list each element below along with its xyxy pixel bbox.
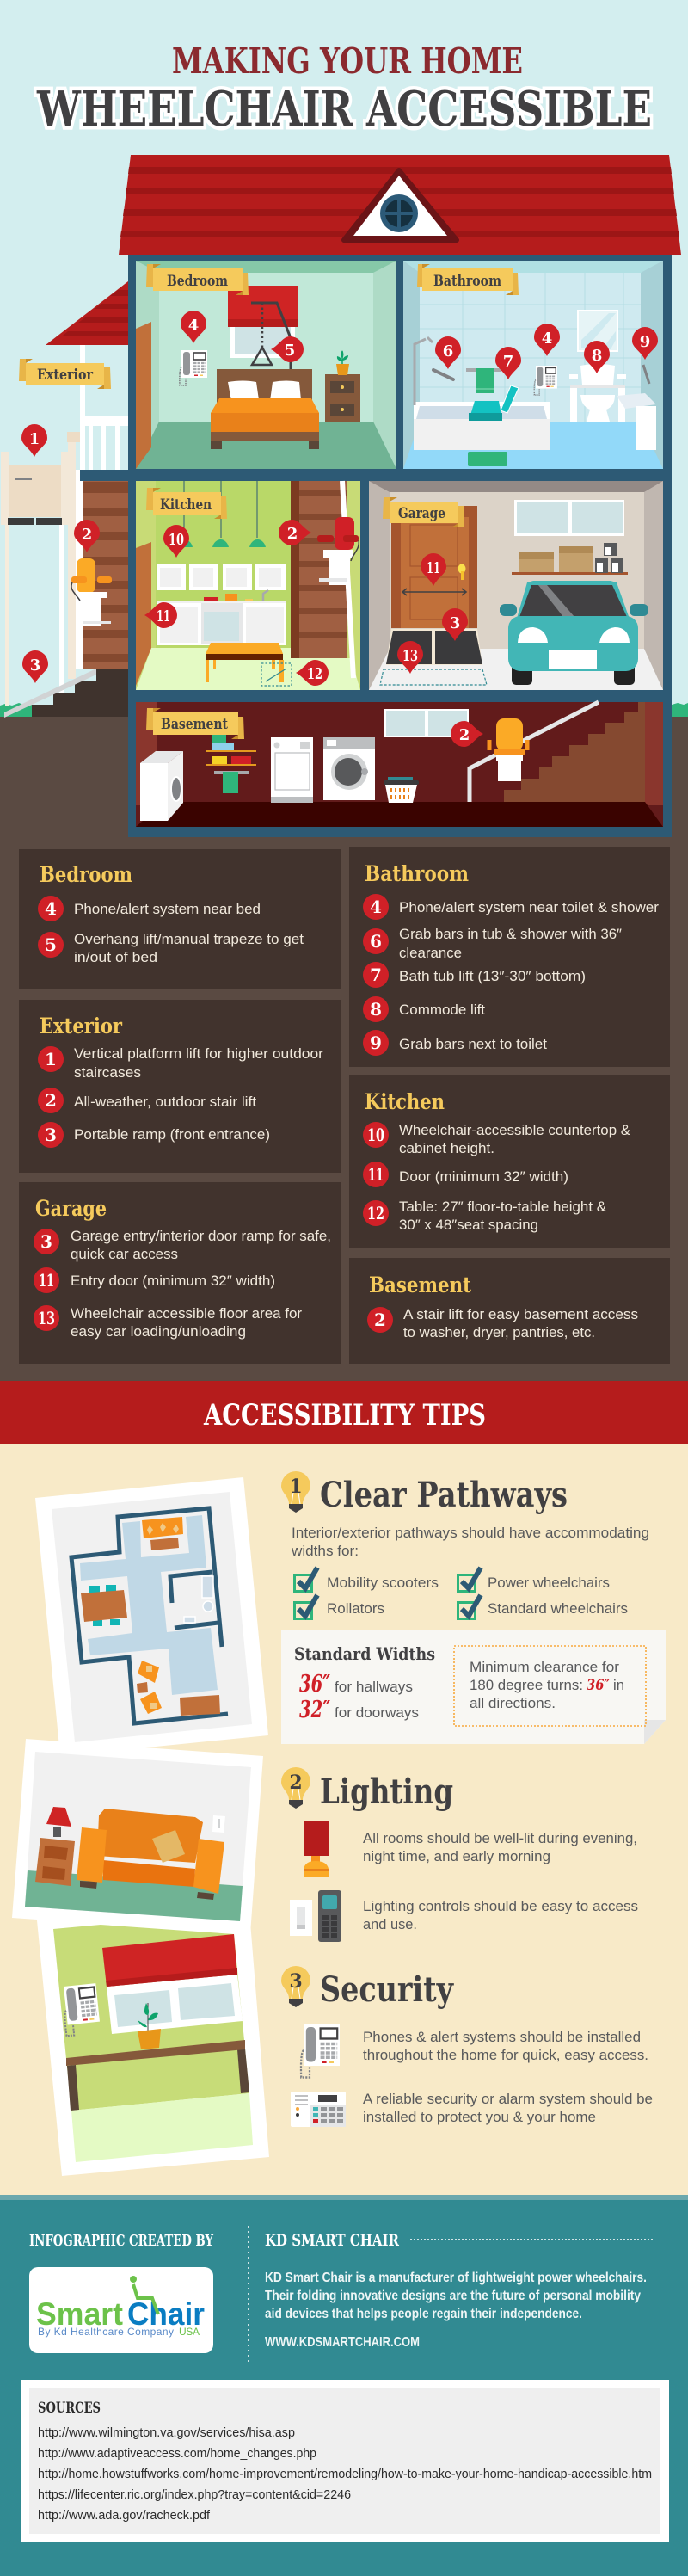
text: well-lit rooms: night time, and early morning (363, 1848, 550, 1864)
pin 2 basement (451, 721, 483, 747)
pin 11 garage (421, 553, 446, 586)
pin 5 (271, 336, 304, 362)
curtain (102, 1934, 237, 1987)
porch column and railing (80, 345, 128, 470)
icon: bulb 2 (281, 1767, 310, 1809)
section 1: clear pathways (281, 1471, 666, 1744)
36 inch hallways: 36″ (299, 1671, 330, 1698)
item 4 (363, 894, 659, 920)
intro text: widths for: (291, 1543, 359, 1559)
pin 3 garage: 3 (450, 614, 460, 632)
pin 13: 13 (402, 647, 418, 665)
icon: wall phone (61, 1983, 101, 2036)
counter with oven (157, 590, 286, 645)
exterior siding wall (5, 442, 128, 706)
icon: bulb 2: 2 (289, 1772, 303, 1794)
floor ramp (386, 629, 482, 665)
wall switch (212, 1815, 225, 1833)
pin 1 (22, 424, 47, 457)
item 1 (38, 1045, 323, 1081)
about block: KD SMART CHAIR (265, 2231, 399, 2250)
item: power wheelchairs: Power wheelchairs (488, 1575, 610, 1591)
roof (119, 155, 681, 255)
pin 2 basement: 2 (459, 726, 470, 744)
ribbon: kitchen (146, 488, 227, 519)
item 2: 2 (374, 1310, 386, 1330)
text: phones and alerts: throughout the home for quick, easy access. (363, 2047, 648, 2063)
pin 6 (435, 336, 461, 369)
pin 2 exterior (74, 520, 100, 552)
sources panel: http://home.howstuffworks.com/home-improvement/remodeling/how-to-make-your-home-handicap-accessible.htm (38, 2468, 652, 2481)
item 13: Wheelchair accessible floor area for (71, 1305, 302, 1322)
pin 7: 7 (503, 353, 513, 371)
item 11: 11 (39, 1270, 54, 1291)
panel: basement: Basement (369, 1273, 471, 1297)
mirror (578, 311, 617, 351)
wall cabinets (157, 564, 286, 590)
item 6: 6 (370, 931, 382, 952)
32 inch doorways (299, 1697, 419, 1723)
seat spacing marker (261, 663, 292, 686)
item 8: Commode lift (399, 1001, 485, 1018)
front-load washer (323, 737, 375, 800)
item 5: Overhang lift/manual trapeze to get (74, 931, 304, 947)
exterior steps (32, 669, 128, 717)
pin 10 (163, 525, 189, 558)
item 4: 4 (45, 898, 57, 919)
intro text (291, 1525, 649, 1559)
background: sky (0, 0, 688, 717)
item 5 (38, 931, 304, 965)
stair lift (317, 517, 359, 585)
car (500, 581, 648, 685)
checklist (294, 1568, 628, 1619)
ribbon: garage (383, 497, 464, 527)
pin 9 (632, 327, 658, 360)
item 7: 7 (370, 964, 382, 985)
item 2: 2 (45, 1090, 57, 1111)
bed (211, 369, 319, 449)
pin 5: 5 (285, 342, 295, 360)
ribbon: kitchen: Kitchen (160, 496, 212, 514)
item 3: Garage entry/interior door ramp for safe, (71, 1228, 331, 1244)
pin 13 (397, 641, 423, 674)
item 6 (363, 926, 622, 961)
note: standard widths (281, 1630, 666, 1744)
sources panel: http://www.wilmington.va.gov/services/hisa.asp (38, 2426, 295, 2440)
pin 1: 1 (29, 430, 40, 448)
item 2: A stair lift for easy basement access (403, 1306, 638, 1322)
washer side view (140, 751, 183, 821)
icon: phone (301, 2024, 340, 2077)
item 1: 1 (45, 1049, 57, 1069)
item 8: 8 (370, 999, 382, 1020)
intro text: Interior/exterior pathways should have accommodating (292, 1525, 649, 1541)
pin 8 (584, 341, 610, 373)
band: accessibility tips (0, 1381, 688, 1444)
text: alarm system (363, 2091, 653, 2125)
item 11: 11 (368, 1164, 384, 1185)
pin 12 (296, 660, 329, 686)
pin 7 (495, 347, 521, 379)
item 9: 9 (370, 1032, 382, 1053)
room: basement (136, 702, 663, 827)
walls (71, 1508, 228, 1723)
heading: Clear Pathways (320, 1475, 568, 1515)
stair rail (470, 702, 599, 802)
callout: minimum clearance: 180 degree turns: (470, 1677, 583, 1693)
item: standard wheelchairs (458, 1595, 628, 1619)
stair lift (489, 718, 527, 781)
pin 4 bedroom: 4 (188, 317, 199, 335)
icon: bulb 3: 3 (289, 1970, 303, 1993)
sources panel: http://www.ada.gov/racheck.pdf (38, 2509, 211, 2523)
width arrow (402, 589, 466, 595)
ribbon: exterior (19, 359, 111, 389)
item 2 (367, 1306, 638, 1340)
pin 3 garage (442, 608, 468, 641)
heading: Security (320, 1969, 454, 2010)
icon: lamp (304, 1821, 329, 1877)
stairs siding (291, 481, 347, 658)
title (36, 40, 652, 138)
entry door (391, 506, 477, 628)
pin 3 exterior: 3 (30, 656, 40, 675)
icon: bulb 1: 1 (289, 1476, 303, 1498)
pin 6: 6 (443, 342, 453, 361)
pin 11 garage: 11 (427, 559, 440, 577)
dishwasher (271, 737, 313, 803)
ribbon: bathroom: Bathroom (433, 273, 501, 290)
item: mobility scooters (294, 1568, 439, 1592)
panel: exterior: Exterior (40, 1014, 123, 1038)
item 3 (34, 1228, 331, 1262)
sources panel (21, 2380, 669, 2542)
sources panel: https://lifecenter.ric.org/index.php?tray=content&cid=2246 (38, 2488, 351, 2502)
pin 2 exterior: 2 (82, 526, 92, 544)
item 11 (363, 1162, 568, 1187)
item 2: All-weather, outdoor stair lift (74, 1094, 256, 1110)
icon: bulb 1 (281, 1471, 310, 1513)
note: standard widths: Standard Widths (294, 1643, 435, 1664)
icon: phone (534, 366, 557, 395)
panel: kitchen: Kitchen (365, 1089, 445, 1114)
logo (29, 2267, 213, 2353)
item 3 (38, 1122, 270, 1148)
photo: living room (12, 1739, 263, 1934)
item 4: 4 (370, 897, 382, 917)
item 1: staircases (74, 1064, 141, 1081)
item 3: Portable ramp (front entrance) (74, 1126, 270, 1143)
text: well-lit rooms: All rooms should be well-lit during evening, (363, 1830, 637, 1846)
item 3: 3 (45, 1125, 57, 1145)
item 13: 13 (38, 1308, 55, 1328)
item 10: cabinet height. (399, 1140, 494, 1156)
item 11: Entry door (minimum 32″ width) (71, 1273, 275, 1289)
item: power wheelchairs (458, 1568, 610, 1592)
exterior stair lift (71, 558, 112, 626)
garage window (514, 500, 624, 536)
room: kitchen (136, 481, 360, 690)
plant (138, 2003, 161, 2049)
pin 4 bathroom: 4 (542, 330, 552, 348)
bathroom fixtures (184, 1576, 213, 1623)
table (206, 643, 284, 682)
panel: bedroom: Bedroom (40, 862, 132, 887)
shower (415, 337, 433, 405)
background: ground (0, 717, 688, 1381)
32 inch doorways: 32″ (299, 1697, 330, 1723)
dashed floor area (380, 669, 487, 685)
ribbon: bathroom (417, 264, 519, 295)
portable ramp (4, 669, 96, 718)
icon: switch and remote (290, 1890, 341, 1942)
item: rollators: Rollators (327, 1600, 384, 1617)
bathtub (414, 402, 550, 450)
logo: Smart (36, 2296, 123, 2332)
tips background (0, 1444, 688, 2195)
basement window (384, 709, 469, 737)
item 6: Grab bars in tub & shower with 36″ (399, 926, 622, 942)
bath tub lift (469, 385, 519, 421)
towel (466, 368, 501, 393)
section 2: lighting (281, 1767, 638, 1942)
basement stairs (504, 702, 645, 802)
about block (249, 2226, 654, 2364)
callout: minimum clearance: Minimum clearance for (470, 1659, 619, 1675)
pin 9: 9 (640, 333, 650, 351)
photo: table, phone, window (37, 1901, 269, 2176)
text: alarm system: installed to protect you & your home (363, 2109, 596, 2125)
item 13 (34, 1305, 302, 1340)
pin 11 kitchen: 11 (157, 607, 170, 626)
callout: minimum clearance: 36″ (587, 1677, 610, 1694)
pin 2 kitchen: 2 (287, 525, 298, 543)
nightstand and plant (325, 350, 360, 422)
credit heading: INFOGRAPHIC CREATED BY (29, 2232, 214, 2250)
32 inch doorways: for doorways (335, 1704, 419, 1721)
overhang trapeze lift (251, 303, 291, 369)
nightstand and lamp (35, 1807, 75, 1886)
item 1: Vertical platform lift for higher outdoor (74, 1045, 323, 1062)
photo: floor plan (35, 1477, 268, 1756)
callout: minimum clearance (454, 1646, 646, 1726)
item 11 (34, 1267, 275, 1293)
grab bar (433, 370, 453, 379)
text: well-lit rooms (363, 1830, 637, 1864)
sofa and table (142, 1517, 183, 1550)
item 10: Wheelchair-accessible countertop & (399, 1122, 631, 1138)
porch roof (46, 281, 128, 345)
armchairs and cabinet (137, 1661, 220, 1716)
pin 11 kitchen (144, 602, 177, 628)
item 12: 30″ x 48″seat spacing (399, 1217, 538, 1233)
window (107, 1975, 243, 2034)
item 2: to washer, dryer, pantries, etc. (403, 1324, 595, 1340)
markers on house (22, 311, 658, 747)
36 inch hallways (299, 1671, 413, 1698)
ribbon: exterior: Exterior (37, 367, 94, 384)
band: accessibility tips: ACCESSIBILITY TIPS (203, 1398, 486, 1433)
item: standard wheelchairs: Standard wheelchairs (488, 1600, 628, 1617)
icon: alarm panel (291, 2092, 346, 2127)
room: bedroom (136, 261, 396, 469)
panel: bathroom (349, 847, 670, 1067)
text: phones and alerts: Phones & alert systems should be installed (363, 2029, 641, 2045)
heading: Lighting (320, 1772, 453, 1812)
text: lighting controls: and use. (363, 1916, 417, 1932)
table (66, 2040, 249, 2111)
ribbon: garage: Garage (398, 505, 445, 522)
item 8 (363, 996, 485, 1022)
item 5: in/out of bed (74, 949, 157, 965)
item 3: 3 (40, 1231, 52, 1252)
section 3: security (281, 1966, 653, 2127)
door (136, 322, 151, 469)
dining set (81, 1585, 127, 1626)
pin 3 exterior (22, 650, 48, 683)
item 12 (363, 1199, 607, 1233)
item 10 (363, 1122, 631, 1156)
title line 1: MAKING YOUR HOME (172, 40, 523, 82)
callout: minimum clearance: all directions. (470, 1695, 556, 1711)
room: garage (369, 481, 663, 690)
pin 12: 12 (307, 665, 322, 683)
sources panel: http://www.adaptiveaccess.com/home_changes.php (38, 2447, 316, 2461)
about block: WWW.KDSMARTCHAIR.COM (265, 2335, 420, 2350)
panel: kitchen (349, 1075, 670, 1248)
36 inch hallways: for hallways (335, 1679, 413, 1695)
vertical platform lift (1, 432, 80, 525)
house frame (80, 255, 672, 837)
item 4: Phone/alert system near bed (74, 901, 261, 917)
logo: Chair (127, 2296, 205, 2332)
text: alarm system: A reliable security or alarm system should be (363, 2091, 653, 2107)
item 7: Bath tub lift (13″-30″ bottom) (399, 968, 586, 984)
item 6: clearance (399, 945, 462, 961)
sources panel: SOURCES (38, 2400, 101, 2417)
item 3: quick car access (71, 1246, 178, 1262)
footer background (0, 2195, 688, 2576)
item 4 (38, 896, 261, 921)
grass (0, 703, 688, 717)
item: mobility scooters: Mobility scooters (327, 1575, 439, 1591)
item 2 (38, 1088, 256, 1113)
window and curtain (228, 286, 298, 358)
item 12: 12 (367, 1203, 384, 1223)
shelf with boxes and cans (512, 543, 628, 575)
grab bar by toilet (643, 365, 649, 384)
pin 4 bedroom (181, 311, 206, 343)
text: phones and alerts (363, 2029, 648, 2063)
pathway carpet (80, 1515, 218, 1695)
panel: garage: Garage (35, 1196, 107, 1221)
pin 10: 10 (169, 531, 184, 549)
ribbon: basement (146, 708, 244, 739)
shelves (206, 735, 256, 793)
pin 2 kitchen (279, 520, 311, 545)
ribbon: bedroom: Bedroom (167, 273, 228, 290)
attic window (344, 170, 457, 240)
sink (617, 393, 656, 450)
bath mat (468, 452, 507, 466)
item 9 (363, 1030, 547, 1056)
text: lighting controls: Lighting controls should be easy to access (363, 1898, 638, 1914)
item 12: Table: 27″ floor-to-table height & (399, 1199, 607, 1215)
item 10: 10 (367, 1125, 384, 1145)
icon: bulb 3 (281, 1966, 310, 2007)
laundry basket (384, 777, 419, 803)
sofa (77, 1809, 224, 1900)
about block: aid devices that helps people regain their independence. (265, 2307, 582, 2321)
item 9: Grab bars next to toilet (399, 1036, 547, 1052)
door (136, 542, 151, 686)
pin 4 bathroom (534, 324, 560, 356)
logo: USA (179, 2326, 200, 2338)
ribbon: bedroom (146, 264, 249, 295)
item 7 (363, 962, 586, 988)
item: rollators (294, 1595, 384, 1619)
item 11: Door (minimum 32″ width) (399, 1168, 568, 1185)
room: bathroom (403, 261, 663, 469)
pin 8: 8 (592, 347, 602, 365)
panel: garage (19, 1182, 341, 1364)
ribbon: basement: Basement (161, 716, 228, 733)
stair rail (342, 481, 353, 678)
icon: phone (180, 350, 207, 385)
panel: basement (349, 1258, 670, 1364)
text: lighting controls (363, 1898, 638, 1932)
pendant lamps (176, 481, 266, 547)
item 4: Phone/alert system near toilet & shower (399, 899, 659, 915)
item 5: 5 (45, 934, 57, 955)
toilet with rails (569, 364, 626, 422)
item 13: easy car loading/unloading (71, 1323, 246, 1340)
panel: exterior (19, 1000, 341, 1173)
logo: By Kd Healthcare Company (38, 2326, 174, 2338)
panel: bedroom (19, 849, 341, 989)
panel: bathroom: Bathroom (365, 861, 469, 886)
callout: minimum clearance: in (613, 1677, 624, 1693)
